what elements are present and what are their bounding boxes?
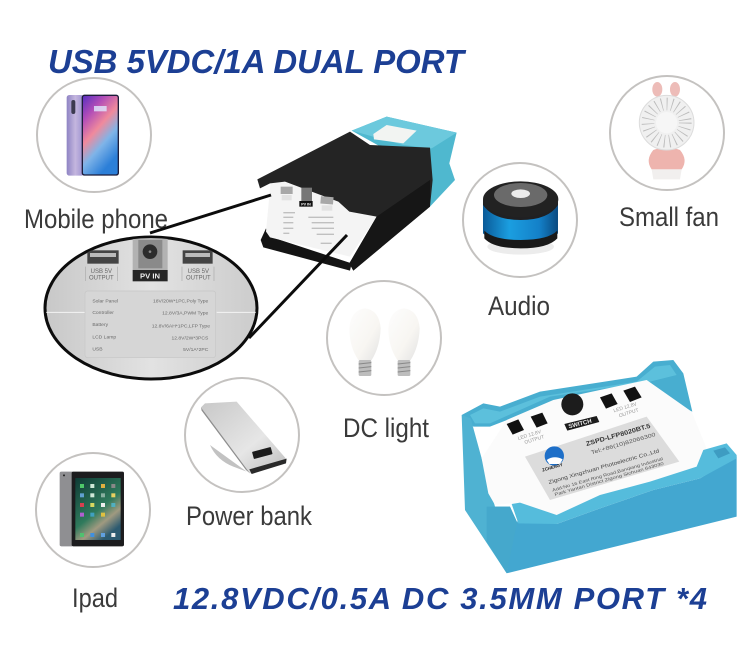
icon ring: DC light [327,281,441,395]
magnified PV IN port: PV IN [140,271,160,280]
black base tray [261,228,352,271]
teal rear housing [352,117,457,207]
magnified spec table [85,291,216,358]
panel: audio [463,163,577,321]
label: DC light: DC light [343,413,429,443]
title: USB port: USB 5VDC/1A DUAL PORT [48,43,467,80]
port: USB right [320,196,334,205]
product label plate: Zigong Xingzhuan Photoelectric Co.,Ltd [548,448,660,486]
icon ring: power bank [185,378,299,492]
magnified spec table: 12.8V/2W*3PCS [171,335,209,341]
magnified spec table: LCD Lamp [92,334,116,340]
magnified USB left: USB 5V [91,269,112,275]
switch button [561,393,599,431]
callout lines to magnified view [150,195,347,338]
label: mobile phone: Mobile phone [24,204,168,234]
front wall [507,457,737,573]
magnified spec table: 12.8V/6AH*1PC,LFP Type [152,323,210,329]
icon: speaker [483,181,558,255]
icon: phone [67,95,119,176]
panel: iPad [36,453,150,613]
panel: mobile phone [24,78,168,234]
label: audio: Audio [488,291,550,321]
left wall [462,415,518,573]
end-cap notch [713,447,730,458]
magnified USB right: USB 5V [188,269,209,275]
magnified PV IN port [133,235,168,281]
icon ring: audio [463,163,577,277]
panel: small fan [610,76,724,232]
magnified spec table: 18V/20W*1PC,Poly Type [153,299,209,305]
magnified USB right [182,250,214,282]
icon: rabbit fan [639,82,694,179]
LED output ports right [600,387,642,419]
icon ring: phone [37,78,151,192]
magnified spec table: Controller [92,310,114,316]
device: black and teal power unit [257,117,457,271]
white unit body [482,380,707,515]
LED output ports left: LED 12.8V [517,429,543,442]
label: small fan: Small fan [619,202,719,232]
back wall of base [462,360,692,427]
icon ring: fan [610,76,724,190]
product label plate: Park Yantan District Zigong Sichuan 643030 [554,461,665,497]
LED output ports left: OUTPUT [524,434,545,446]
indicator label [373,125,417,143]
spec lines [283,213,334,243]
label: power bank: Power bank [186,501,312,531]
switch button: SWITCH [568,419,592,430]
label: iPad: Ipad [72,583,118,613]
product label plate: ZCHENGY [542,462,563,473]
magnified spec table: 5V/1A*2PC [183,347,209,353]
magnified spec table: USB [92,346,103,352]
icon: power bank device [201,402,287,474]
LED output ports right: OUTPUT [618,408,640,419]
port: PV input [301,188,312,201]
magnified spec table: Battery [92,322,109,328]
black shell [257,132,433,271]
white front panel [266,182,377,257]
magnified USB left: OUTPUT [89,276,114,282]
callout: magnified port panel [45,235,257,379]
magnified USB left [85,250,119,282]
product label plate: ZSPD-LFP8020BT.5 [585,423,652,448]
LED output ports left [507,413,548,446]
product label plate: Add:No 16 East Ring Road,Banqiang Industrial [552,456,664,493]
front wall rim [512,443,737,524]
icon: tablet [60,472,124,546]
device: teal base with white unit [462,360,737,573]
magnified spec table: Solar Panel [92,299,118,305]
panel: power bank [185,378,312,531]
port: USB left [281,187,293,194]
icon ring: iPad [36,453,150,567]
LED output ports right: LED 12.8V [613,401,638,414]
title: DC port: 12.8VDC/0.5A DC 3.5MM PORT *4 [173,581,707,616]
device: black and teal power unit: PV IN [301,202,311,206]
magnified spec table: 12.8V/3A,PWM Type [162,311,209,317]
panel: DC light [327,281,441,443]
icon: two bulbs [349,308,420,376]
magnified USB right: OUTPUT [186,276,211,282]
product label plate [525,417,679,500]
product label plate: Tel:+86(10)82066300 [591,432,656,456]
